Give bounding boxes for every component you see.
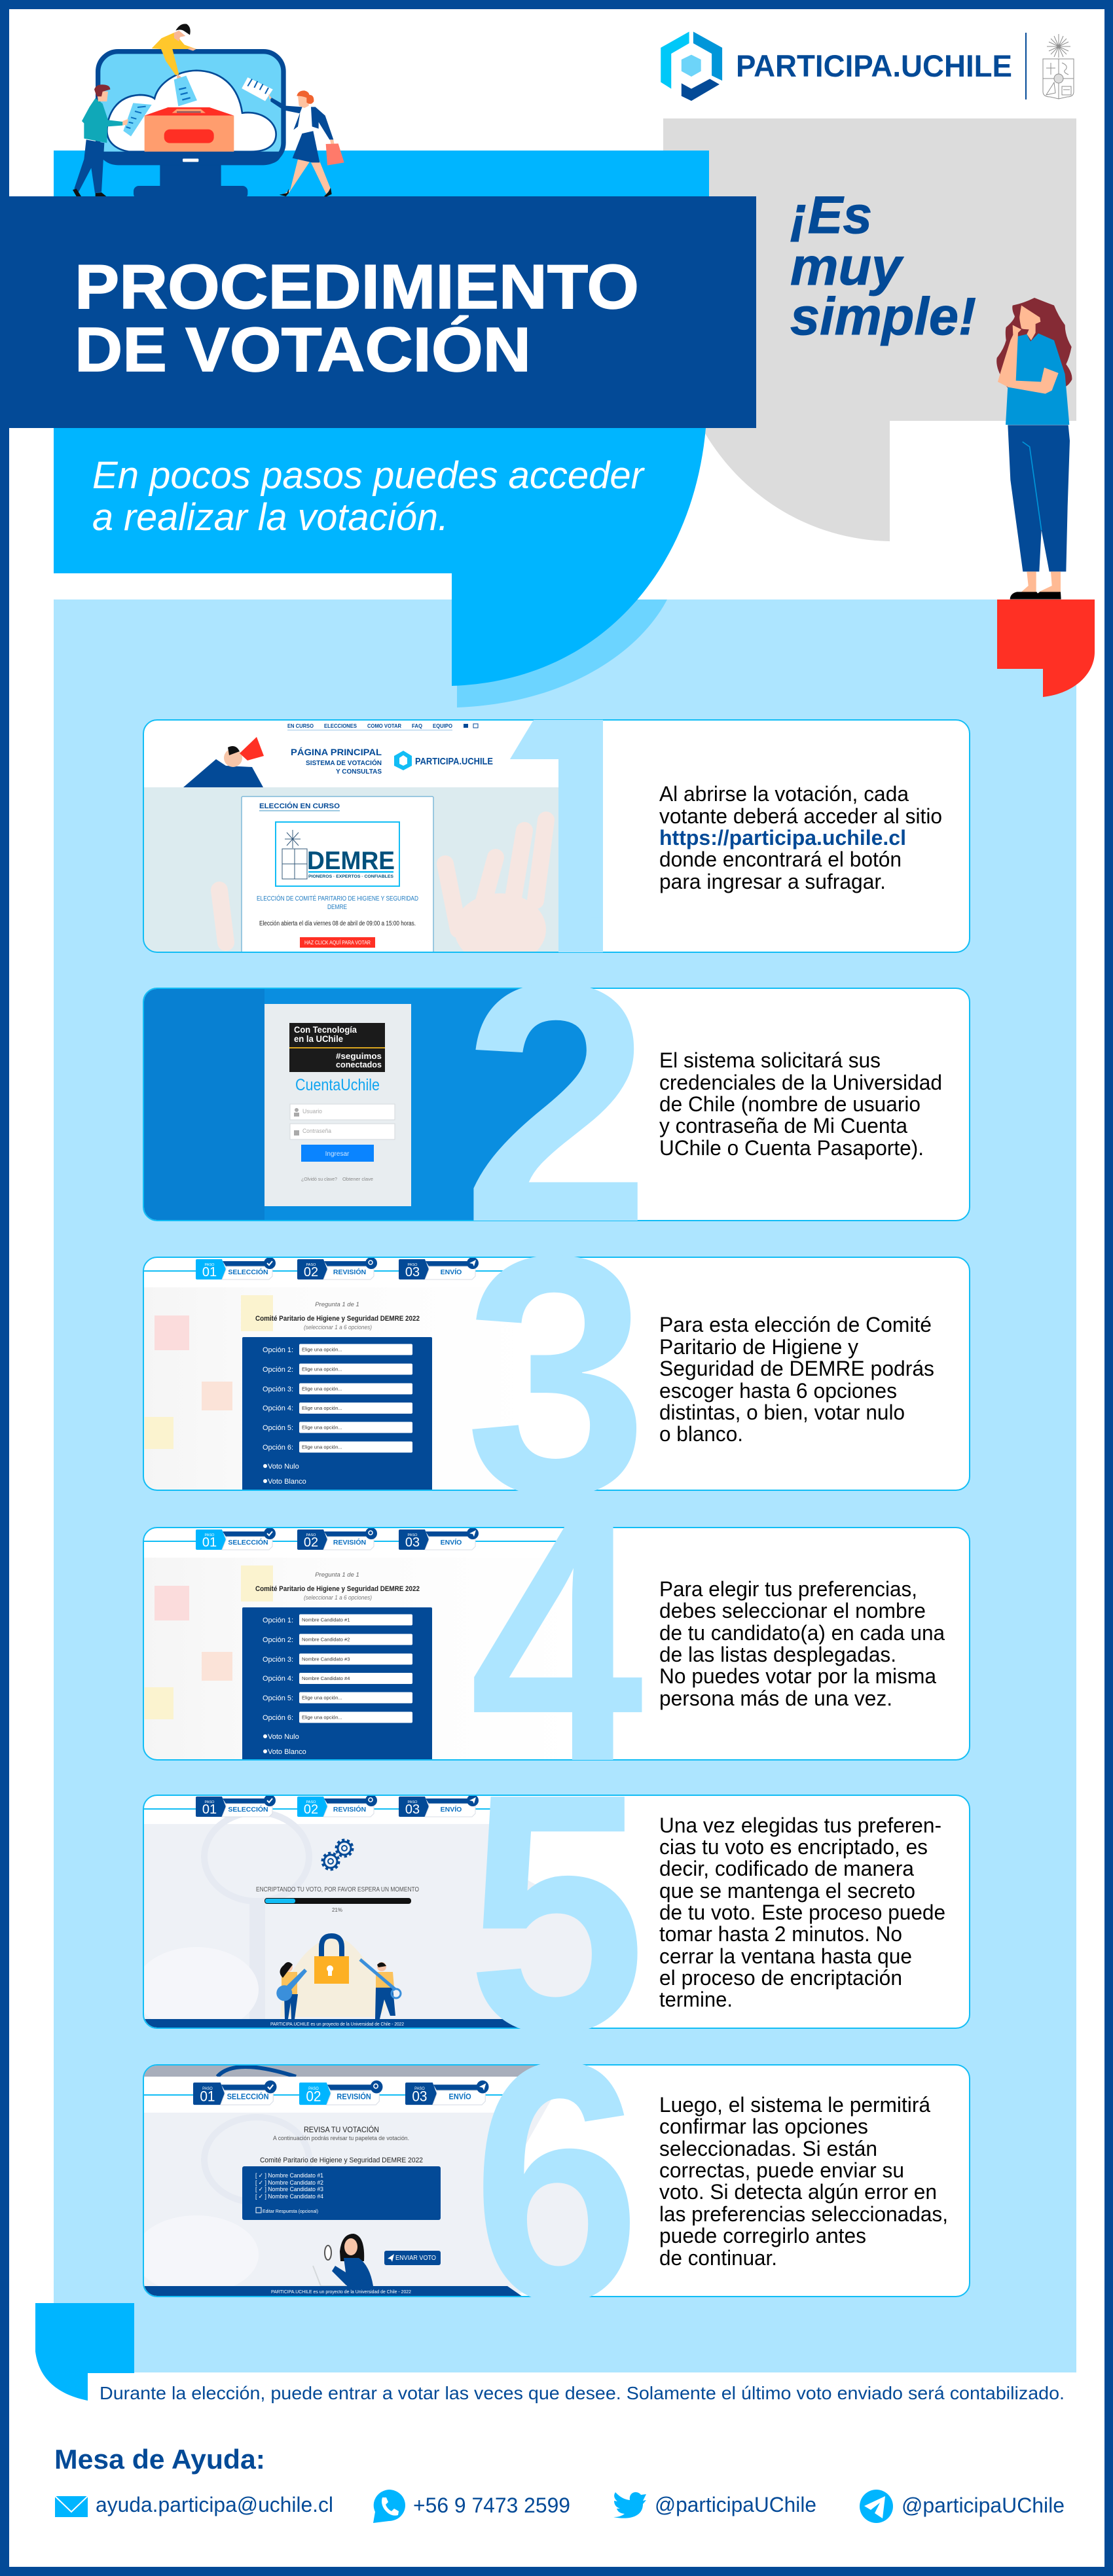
navigation menu: EQUIPO bbox=[433, 723, 452, 729]
screenshot: filled form: Comité Paritario de Higiene y Seguridad DEMRE 2022 bbox=[255, 1585, 420, 1593]
options panel: Opción 3: bbox=[263, 1386, 293, 1393]
speech bubble: red bbox=[997, 599, 1095, 697]
text: step 2: UChile o Cuenta Pasaporte). bbox=[659, 1136, 924, 1160]
options panel: Nombre Candidato #3 bbox=[302, 1656, 350, 1662]
election card: DEMRE bbox=[327, 904, 347, 911]
callout: es muy simple: simple! bbox=[790, 287, 976, 346]
step 03: PASO bbox=[408, 1533, 418, 1537]
options panel: Voto Nulo bbox=[268, 1463, 299, 1471]
step 03: 03 bbox=[405, 1802, 420, 1817]
screenshot: review: REVISA TU VOTACIÓN bbox=[304, 2124, 379, 2134]
speech bubble tail: pale blue bbox=[457, 599, 667, 707]
small logo: PARTICIPA.UCHILE bbox=[415, 756, 493, 767]
note text: Durante la elección, puede entrar a votar las veces que desee. Solamente el último voto enviado será contabilizado. bbox=[100, 2383, 1065, 2403]
review panel: [ ✓ ] Nombre Candidato #2 bbox=[255, 2179, 323, 2187]
options panel: Opción 1: bbox=[263, 1617, 293, 1624]
step 03: ENVÍO bbox=[441, 1268, 462, 1276]
step 02 bbox=[299, 2081, 382, 2105]
heading: main page: PÁGINA PRINCIPAL bbox=[291, 747, 382, 757]
options panel: Opción 5: bbox=[263, 1694, 293, 1702]
panel: step 3 bbox=[143, 1185, 970, 1565]
subtitle: En pocos pasos puedes acceder bbox=[92, 454, 646, 497]
step 01: SELECCIÓN bbox=[228, 1805, 268, 1814]
election card: ELECCIÓN EN CURSO bbox=[259, 802, 340, 810]
title: PROCEDIMIENTO bbox=[75, 252, 639, 322]
text: step 6: confirmar las opciones bbox=[659, 2115, 868, 2138]
person: top bbox=[152, 24, 197, 106]
step 01: PASO bbox=[205, 1263, 215, 1267]
step 02: REVISIÓN bbox=[333, 1268, 366, 1276]
icon: twitter bbox=[613, 2492, 646, 2518]
step 01 bbox=[196, 1795, 276, 1817]
text: step 3: distintas, o bien, votar nulo bbox=[659, 1401, 905, 1424]
screenshot: selection form: Comité Paritario de Higiene y Seguridad DEMRE 2022 bbox=[255, 1315, 420, 1323]
screenshot: login bbox=[143, 988, 593, 1221]
heading: main page bbox=[291, 747, 382, 776]
step 02 bbox=[297, 1528, 377, 1550]
options panel: Opción 4: bbox=[263, 1675, 293, 1683]
heading: help desk: Mesa de Ayuda: bbox=[54, 2444, 265, 2475]
step 01 bbox=[196, 1257, 276, 1279]
panel: step 4 bbox=[143, 1452, 970, 1832]
banner: en la UChile bbox=[294, 1033, 343, 1044]
text: step 5: cias tu voto es encriptado, es bbox=[659, 1835, 928, 1859]
screenshot: selection form: Pregunta 1 de 1 bbox=[315, 1301, 359, 1308]
panel: step 6 bbox=[134, 1992, 970, 2372]
login form: Obtener clave bbox=[342, 1176, 373, 1182]
button: send vote: ENVIAR VOTO bbox=[395, 2255, 436, 2262]
navigation menu: ELECCIONES bbox=[324, 723, 357, 729]
screenshot: filled form: (seleccionar 1 a 6 opciones) bbox=[304, 1594, 372, 1601]
footer band: PARTICIPA.UCHILE es un proyecto de la Universidad de Chile - 2022 bbox=[271, 2289, 411, 2295]
options panel: Opción 5: bbox=[263, 1424, 293, 1432]
options panel: Opción 2: bbox=[263, 1366, 293, 1374]
step 02: 02 bbox=[304, 1535, 318, 1550]
text: step 1: votante deberá acceder al sitio bbox=[659, 804, 942, 828]
options panel: Opción 3: bbox=[263, 1656, 293, 1664]
options panel: Nombre Candidato #1 bbox=[302, 1617, 350, 1623]
step 01: PASO bbox=[202, 2087, 213, 2091]
logo wordmark: PARTICIPA.UCHILE bbox=[736, 48, 1012, 83]
election card: ELECCIÓN DE COMITÉ PARITARIO DE HIGIENE Y SEGURIDAD bbox=[257, 894, 418, 903]
button: send vote bbox=[384, 2251, 441, 2265]
text: step 6 bbox=[659, 2093, 948, 2270]
navigation menu bbox=[287, 724, 478, 730]
text: step 5: de tu voto. Este proceso puede bbox=[659, 1901, 945, 1924]
options panel: Voto Blanco bbox=[268, 1478, 306, 1486]
step 01: PASO bbox=[205, 1800, 215, 1804]
step 02: 02 bbox=[304, 1265, 318, 1279]
text: step 5: el proceso de encriptación bbox=[659, 1966, 902, 1990]
text: step 2: El sistema solicitará sus bbox=[659, 1048, 881, 1072]
panel: step 1 bbox=[143, 719, 970, 953]
options panel: Opción 2: bbox=[263, 1636, 293, 1644]
contact: email: ayuda.participa@uchile.cl bbox=[96, 2493, 333, 2516]
title band bbox=[9, 196, 756, 428]
step 01: SELECCIÓN bbox=[227, 2092, 269, 2101]
progress bar bbox=[265, 1898, 411, 1913]
step 03: ENVÍO bbox=[441, 1538, 462, 1547]
step 01: 01 bbox=[200, 2088, 215, 2105]
text: step 4: debes seleccionar el nombre bbox=[659, 1599, 926, 1622]
step 02: PASO bbox=[306, 1263, 316, 1267]
options panel: Elige una opción... bbox=[302, 1715, 342, 1720]
number 3: 3 bbox=[465, 1185, 648, 1565]
step 01: PASO bbox=[205, 1533, 215, 1537]
text: step 6: seleccionadas. Si están bbox=[659, 2137, 877, 2160]
banner: #seguimos bbox=[336, 1051, 382, 1061]
text: step 3: Para esta elección de Comité bbox=[659, 1313, 932, 1336]
step 03: ENVÍO bbox=[441, 1805, 462, 1814]
election card bbox=[242, 796, 433, 957]
step 01: 01 bbox=[202, 1802, 217, 1817]
text: step 1: para ingresar a sufragar. bbox=[659, 870, 886, 893]
step 01 bbox=[193, 2081, 276, 2105]
text: step 1 bbox=[659, 782, 942, 893]
title line 2: DE VOTACIÓN bbox=[75, 315, 531, 385]
banner bbox=[289, 1023, 385, 1072]
text: step 3: o blanco. bbox=[659, 1422, 743, 1446]
options panel: Opción 6: bbox=[263, 1444, 293, 1452]
speech bubble: bright blue bbox=[54, 151, 709, 686]
options panel bbox=[242, 1607, 432, 1764]
screenshot: login: CuentaUchile bbox=[295, 1076, 380, 1094]
step 02: PASO bbox=[306, 1800, 316, 1804]
text: step 2: de Chile (nombre de usuario bbox=[659, 1092, 921, 1116]
step 02: REVISIÓN bbox=[333, 1538, 366, 1547]
text: step 3: Paritario de Higiene y bbox=[659, 1335, 858, 1359]
footer band bbox=[143, 2286, 522, 2297]
step 02: 02 bbox=[306, 2088, 321, 2105]
illustration: woman with magnifier bbox=[313, 2234, 373, 2286]
screenshot: review: Comité Paritario de Higiene y Seguridad DEMRE 2022 bbox=[260, 2156, 423, 2164]
options panel: Elige una opción... bbox=[302, 1367, 342, 1372]
illustration: megaphone bbox=[183, 737, 264, 787]
login form: Contraseña bbox=[302, 1128, 331, 1134]
text: step 5: termine. bbox=[659, 1988, 733, 2011]
text: step 2 bbox=[659, 1048, 942, 1160]
election card: PIONEROS · EXPERTOS · CONFIABLES bbox=[308, 875, 393, 879]
options panel: Elige una opción... bbox=[302, 1347, 342, 1352]
banner: Con Tecnología bbox=[294, 1024, 357, 1035]
screenshot: main page bbox=[143, 723, 558, 965]
navigation menu: FAQ bbox=[412, 723, 422, 729]
step 01: SELECCIÓN bbox=[228, 1268, 268, 1276]
navigation menu: COMO VOTAR bbox=[367, 723, 401, 729]
panel: light blue steps background bbox=[54, 599, 1076, 2372]
contact: telegram: @participaUChile bbox=[902, 2494, 1065, 2517]
options panel: Opción 6: bbox=[263, 1714, 293, 1722]
step 03: 03 bbox=[405, 1265, 420, 1279]
progress bar: 21% bbox=[332, 1907, 342, 1913]
callout: es muy simple: muy bbox=[790, 238, 904, 296]
illustration: thinking woman bbox=[996, 298, 1072, 599]
person: left bbox=[73, 84, 152, 196]
text: step 5 bbox=[659, 1814, 945, 2011]
icon: whatsapp bbox=[373, 2490, 405, 2523]
icon: mail bbox=[55, 2496, 88, 2517]
options panel bbox=[242, 1337, 432, 1494]
step 01: SELECCIÓN bbox=[228, 1538, 268, 1547]
step 03: PASO bbox=[408, 1263, 418, 1267]
callout: es muy simple: ¡Es bbox=[790, 186, 872, 245]
screenshot: filled form bbox=[143, 1528, 575, 1764]
review panel: [ ✓ ] Nombre Candidato #3 bbox=[255, 2186, 323, 2193]
step 03 bbox=[399, 1257, 479, 1279]
text: step 1: Al abrirse la votación, cada bbox=[659, 782, 909, 806]
step 03: PASO bbox=[414, 2087, 425, 2091]
election card: HAZ CLICK AQUÍ PARA VOTAR bbox=[304, 940, 371, 946]
text: step 2: y contraseña de Mi Cuenta bbox=[659, 1114, 907, 1137]
options panel: Elige una opción... bbox=[302, 1444, 342, 1450]
text: step 1: https://participa.uchile.cl bbox=[659, 826, 906, 850]
step 03: 03 bbox=[405, 1535, 420, 1550]
step 02 bbox=[297, 1257, 377, 1279]
footer band bbox=[143, 2019, 519, 2028]
text: step 6: puede corregirlo antes bbox=[659, 2224, 866, 2247]
speech bubble: note bbox=[35, 2303, 134, 2401]
text: step 6: correctas, puede enviar su bbox=[659, 2158, 904, 2182]
text: step 6: las preferencias seleccionadas, bbox=[659, 2202, 948, 2226]
text: step 5: tomar hasta 2 minutos. No bbox=[659, 1922, 902, 1946]
text: step 6: voto. Si detecta algún error en bbox=[659, 2180, 937, 2204]
text: step 5: cerrar la ventana hasta que bbox=[659, 1944, 912, 1968]
number 2: 2 bbox=[462, 913, 651, 1293]
login form: Usuario bbox=[302, 1108, 322, 1115]
screenshot: selection form bbox=[143, 1257, 530, 1494]
step 02: 02 bbox=[304, 1802, 318, 1817]
heading: main page: Y CONSULTAS bbox=[336, 768, 382, 776]
illustration: voting on a computer bbox=[73, 24, 344, 199]
step 03: 03 bbox=[412, 2088, 428, 2105]
contact: twitter: @participaUChile bbox=[655, 2493, 816, 2516]
step 02: REVISIÓN bbox=[333, 1805, 366, 1814]
text: step 2: credenciales de la Universidad bbox=[659, 1071, 942, 1094]
text: step 4: de las listas desplegadas. bbox=[659, 1643, 896, 1666]
options panel: Elige una opción... bbox=[302, 1386, 342, 1391]
text: step 5: decir, codificado de manera bbox=[659, 1857, 914, 1880]
navigation menu: EN CURSO bbox=[287, 723, 314, 729]
number 6: 6 bbox=[472, 1992, 641, 2372]
icon: telegram bbox=[860, 2490, 893, 2523]
subtitle bbox=[92, 454, 646, 539]
login form bbox=[290, 1104, 395, 1182]
text: step 3: Seguridad de DEMRE podrás bbox=[659, 1357, 934, 1380]
text: step 6: Luego, el sistema le permitirá bbox=[659, 2093, 930, 2117]
icon: gears bbox=[323, 1840, 352, 1869]
number 5: 5 bbox=[467, 1723, 646, 2103]
step 03 bbox=[399, 1795, 479, 1817]
election card: DEMRE bbox=[307, 847, 395, 875]
person: right bbox=[242, 77, 344, 197]
number 1: 1 bbox=[465, 645, 655, 1025]
logo: PARTICIPA.UCHILE bbox=[661, 31, 722, 101]
screenshot: selection form: (seleccionar 1 a 6 opciones) bbox=[304, 1324, 372, 1331]
options panel: Opción 1: bbox=[263, 1346, 293, 1354]
screenshot: review bbox=[134, 2065, 609, 2297]
options panel: Nombre Candidato #4 bbox=[302, 1675, 350, 1681]
step 02 bbox=[297, 1795, 377, 1817]
options panel: Elige una opción... bbox=[302, 1424, 342, 1431]
review panel bbox=[242, 2166, 441, 2220]
text: step 4 bbox=[659, 1577, 945, 1710]
text: step 1: donde encontrará el botón bbox=[659, 848, 902, 871]
speech bubble: grey bbox=[663, 118, 1076, 541]
text: step 4: de tu candidato(a) en cada una bbox=[659, 1621, 945, 1645]
panel: step 5 bbox=[134, 1723, 970, 2103]
text: step 6: de continuar. bbox=[659, 2246, 777, 2270]
election card: Elección abierta el día viernes 08 de abril de 09:00 a 15:00 horas. bbox=[259, 920, 416, 927]
step 03: ENVÍO bbox=[449, 2092, 471, 2101]
step 01: 01 bbox=[202, 1265, 217, 1279]
review panel: [ ✓ ] Nombre Candidato #1 bbox=[255, 2172, 323, 2179]
icon: university crest bbox=[1043, 34, 1074, 99]
text: step 3 bbox=[659, 1313, 934, 1446]
options panel: Elige una opción... bbox=[302, 1405, 342, 1411]
review panel: Editar Respuesta (opcional) bbox=[263, 2208, 318, 2214]
banner: conectados bbox=[336, 1060, 382, 1069]
text: step 4: No puedes votar por la misma bbox=[659, 1664, 936, 1688]
login form: ¿Olvidó su clave? bbox=[301, 1176, 337, 1182]
step 01 bbox=[196, 1528, 276, 1550]
options panel: Voto Nulo bbox=[268, 1733, 299, 1741]
login form: Ingresar bbox=[325, 1151, 350, 1158]
screenshot: encrypting bbox=[134, 1795, 609, 2032]
contact: whatsapp bbox=[373, 2490, 570, 2523]
options panel: Nombre Candidato #2 bbox=[302, 1636, 350, 1643]
callout: es muy simple bbox=[790, 186, 976, 346]
panel: step 2 bbox=[143, 988, 970, 1221]
options panel: Voto Blanco bbox=[268, 1748, 306, 1756]
divider bbox=[1025, 33, 1027, 99]
screenshot: encrypting: ENCRIPTANDO TU VOTO, POR FAVOR ESPERA UN MOMENTO bbox=[256, 1886, 419, 1893]
contact: whatsapp: +56 9 7473 2599 bbox=[413, 2494, 570, 2517]
text: step 5: Una vez elegidas tus preferen- bbox=[659, 1814, 941, 1837]
illustration: lock and keys bbox=[276, 1936, 401, 2019]
text: step 3: escoger hasta 6 opciones bbox=[659, 1379, 897, 1403]
small logo bbox=[394, 751, 493, 770]
subtitle: a realizar la votación. bbox=[92, 496, 448, 539]
number 4: 4 bbox=[469, 1452, 646, 1832]
options panel: Opción 4: bbox=[263, 1404, 293, 1412]
heading: main page: SISTEMA DE VOTACIÓN bbox=[306, 759, 382, 767]
number 1 bbox=[510, 720, 603, 952]
step 03 bbox=[405, 2081, 488, 2105]
footer band: PARTICIPA.UCHILE es un proyecto de la Universidad de Chile - 2022 bbox=[270, 2021, 404, 2027]
screenshot: filled form: Pregunta 1 de 1 bbox=[315, 1571, 359, 1579]
options panel: Elige una opción... bbox=[302, 1695, 342, 1700]
text: step 5: que se mantenga el secreto bbox=[659, 1879, 915, 1903]
review panel: [ ✓ ] Nombre Candidato #4 bbox=[255, 2193, 323, 2200]
step 02: PASO bbox=[308, 2087, 319, 2091]
text: step 4: persona más de una vez. bbox=[659, 1687, 892, 1710]
step 03: PASO bbox=[408, 1800, 418, 1804]
step 03 bbox=[399, 1528, 479, 1550]
step 02: PASO bbox=[306, 1533, 316, 1537]
text: step 4: Para elegir tus preferencias, bbox=[659, 1577, 917, 1601]
step 01: 01 bbox=[202, 1535, 217, 1550]
contact: telegram bbox=[860, 2490, 1065, 2523]
screenshot: review: A continuación podrás revisar tu papeleta de votación. bbox=[273, 2135, 409, 2141]
step 02: REVISIÓN bbox=[337, 2092, 371, 2101]
